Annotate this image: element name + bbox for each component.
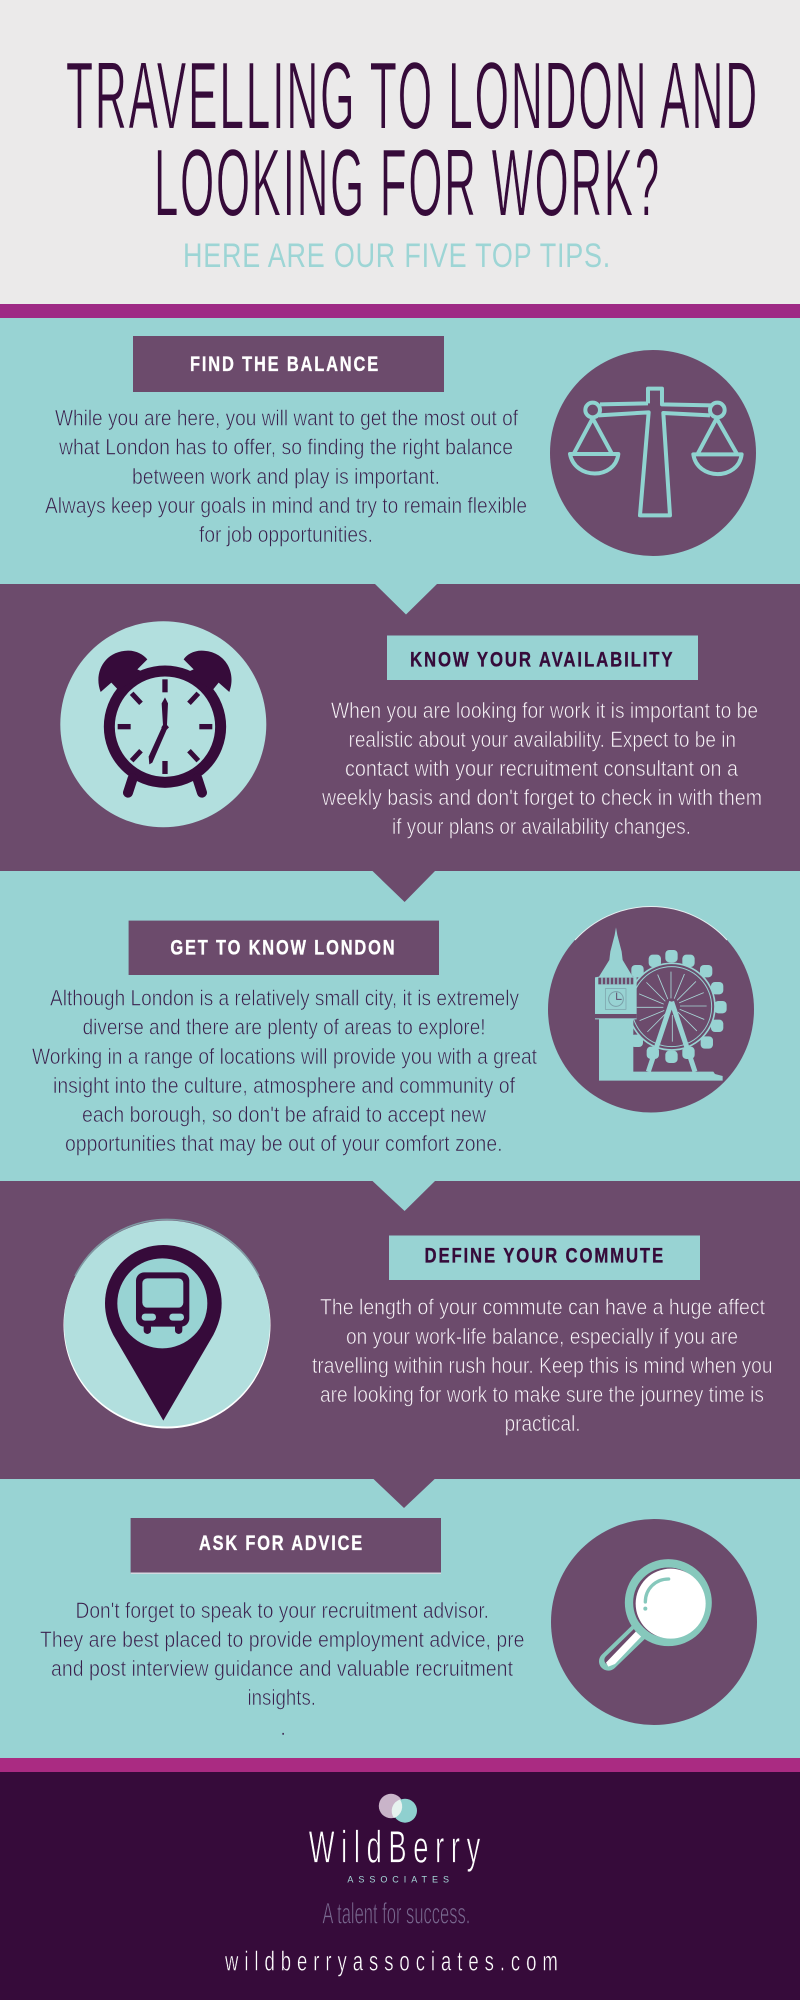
text: find the balance: between work and play is important.	[132, 464, 440, 489]
header panel	[0, 0, 800, 304]
text: know your availability: contact with your recruitment consultant on a	[345, 756, 738, 781]
icon: magnifying glass	[551, 1519, 757, 1725]
icon: scales	[550, 350, 756, 556]
text: find the balance: While you are here, you will want to get the most out of	[55, 406, 519, 431]
heading: ask for advice	[131, 1518, 441, 1574]
heading: find the balance	[133, 336, 444, 392]
logo subtitle: ASSOCIATES	[347, 1874, 449, 1884]
text: ask for advice: and post interview guidance and valuable recruitment	[51, 1656, 514, 1681]
panel: find the balance	[0, 318, 800, 584]
panel: footer	[0, 1772, 800, 2000]
bottom magenta bar	[0, 1758, 800, 1772]
icon: bus location pin	[64, 1219, 270, 1428]
panel: define your commute	[0, 1181, 800, 1479]
heading: know your availability: KNOW YOUR AVAILABILITY	[410, 648, 674, 672]
heading: find the balance: FIND THE BALANCE	[190, 352, 380, 376]
arrow: teal notch	[372, 1181, 435, 1211]
text: get to know london	[32, 986, 538, 1156]
panel: know your availability	[0, 584, 800, 871]
heading: get to know london: GET TO KNOW LONDON	[170, 936, 396, 960]
text: know your availability	[321, 698, 762, 839]
heading: know your availability	[387, 636, 698, 680]
icon: alarm clock	[60, 621, 266, 827]
title	[66, 42, 759, 236]
logo: overlapping berries	[379, 1794, 417, 1823]
text: know your availability: if your plans or availability changes.	[392, 814, 691, 839]
arrow: purple pointer	[374, 1479, 435, 1508]
text: get to know london: Although London is a relatively small city, it is extremely	[50, 986, 520, 1011]
arrow: purple pointer	[372, 871, 435, 902]
heading: get to know london	[129, 921, 439, 975]
text: get to know london: insight into the culture, atmosphere and community of	[53, 1073, 516, 1098]
heading: ask for advice: ASK FOR ADVICE	[199, 1531, 364, 1555]
text: find the balance: for job opportunities.	[199, 522, 373, 547]
text: get to know london: each borough, so don't be afraid to accept new	[82, 1102, 487, 1127]
capsules	[631, 950, 727, 1063]
text: find the balance: what London has to offer, so finding the right balance	[58, 435, 513, 460]
heading: define your commute: DEFINE YOUR COMMUTE	[424, 1244, 665, 1268]
text: ask for advice: Don't forget to speak to your recruitment advisor.	[76, 1598, 489, 1623]
top magenta bar	[0, 304, 800, 318]
text: find the balance	[45, 406, 527, 547]
text: find the balance: Always keep your goals in mind and try to remain flexible	[45, 493, 527, 518]
text: define your commute	[312, 1295, 772, 1436]
panel: get to know london	[0, 871, 800, 1181]
text: define your commute: practical.	[505, 1411, 581, 1436]
tagline: A talent for success.	[322, 1897, 470, 1930]
text: ask for advice: They are best placed to provide employment advice, pre	[40, 1627, 524, 1652]
text: get to know london: diverse and there are plenty of areas to explore!	[83, 1015, 486, 1040]
text: define your commute: on your work-life balance, especially if you are	[346, 1324, 738, 1349]
panel: ask for advice	[0, 1479, 800, 1758]
text: ask for advice: .	[280, 1715, 286, 1740]
text: know your availability: realistic about your availability. Expect to be in	[348, 727, 736, 752]
text: get to know london: Working in a range of locations will provide you with a great	[32, 1044, 538, 1069]
subtitle: HERE ARE OUR FIVE TOP TIPS.	[183, 237, 611, 275]
logo wordmark: WildBerry	[309, 1822, 487, 1873]
icon: big ben and london eye	[548, 906, 754, 1112]
website: wildberryassociates.com	[224, 1946, 564, 1977]
text: get to know london: opportunities that may be out of your comfort zone.	[65, 1131, 502, 1156]
arrow: teal notch	[375, 584, 437, 614]
text: ask for advice: insights.	[248, 1685, 316, 1710]
heading: define your commute	[389, 1236, 700, 1280]
text: ask for advice	[40, 1598, 524, 1740]
